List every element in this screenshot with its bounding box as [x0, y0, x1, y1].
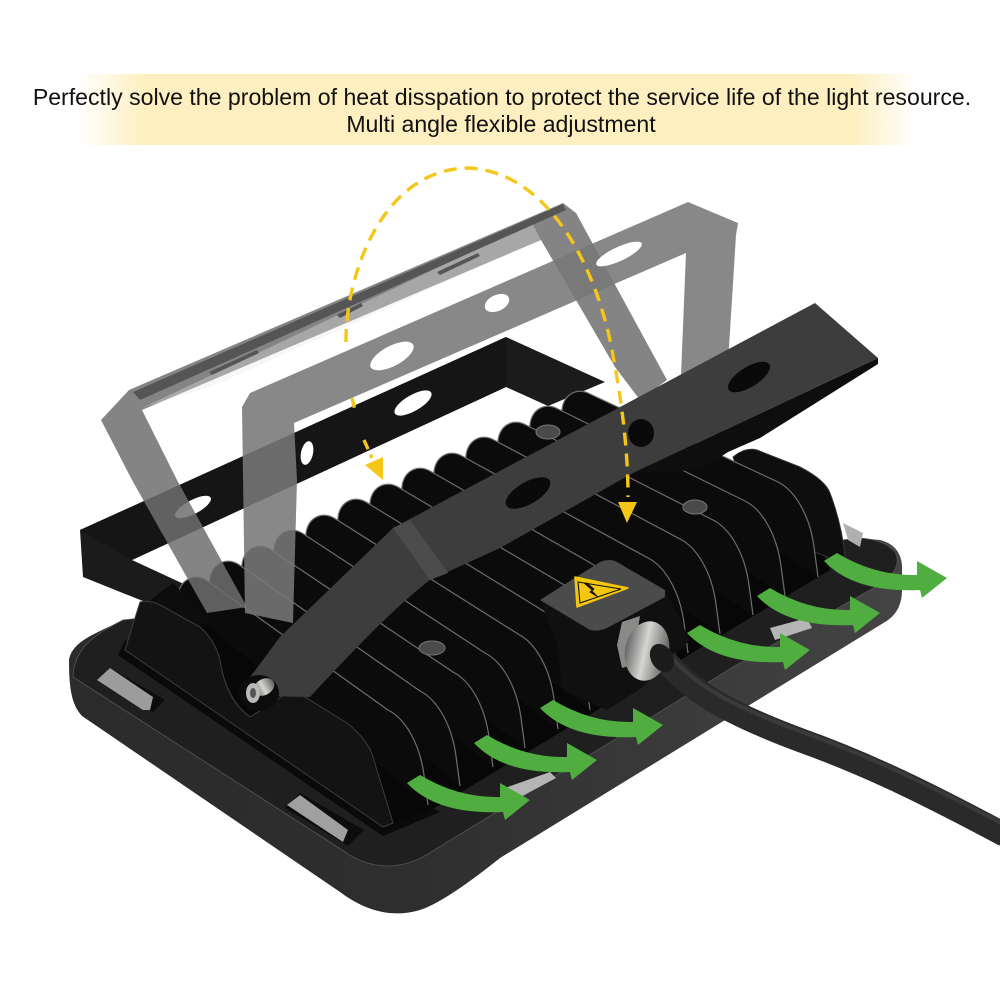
translucent bracket, middle position [242, 202, 738, 623]
junction box [540, 560, 690, 710]
caption line 1: Perfectly solve the problem of heat disspation to protect the service life of the light resource. [33, 84, 971, 110]
icon: high voltage warning triangle [575, 577, 628, 607]
mounting tabs [97, 523, 863, 846]
front mounting bracket [248, 303, 878, 697]
banner with caption: Multi angle flexible adjustment [346, 111, 656, 137]
bracket holes [501, 356, 775, 515]
rear black bracket [80, 337, 605, 628]
screws [419, 425, 707, 655]
heat sink fins [145, 391, 845, 825]
base plate [69, 523, 902, 913]
green airflow arrows [407, 553, 947, 820]
left hinge end plate [125, 583, 393, 827]
arrowheads [365, 457, 637, 523]
hinge bolt [239, 675, 279, 711]
yellow dashed rotation arrow [346, 168, 637, 523]
power cable [665, 658, 1000, 835]
banner with caption [33, 74, 971, 145]
translucent bracket, rotated far position [101, 203, 667, 613]
cable gland [617, 616, 679, 685]
